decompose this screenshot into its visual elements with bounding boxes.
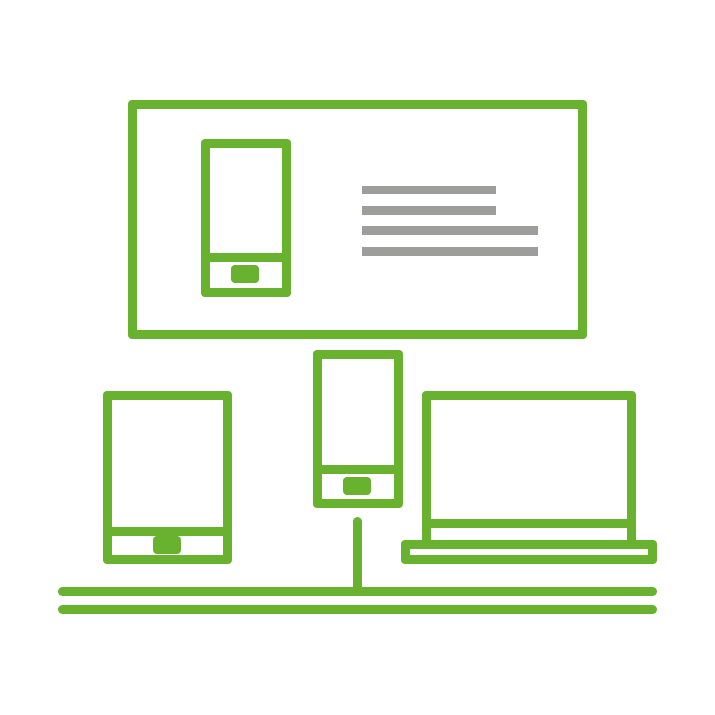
icon: phone	[313, 350, 403, 508]
text lines placeholder	[362, 186, 538, 256]
icon: phone on monitor	[201, 139, 291, 297]
panel: monitor screen	[128, 100, 587, 339]
connector: stem and base lines	[58, 517, 657, 614]
icon: laptop	[401, 391, 657, 564]
icon: tablet	[103, 391, 232, 564]
